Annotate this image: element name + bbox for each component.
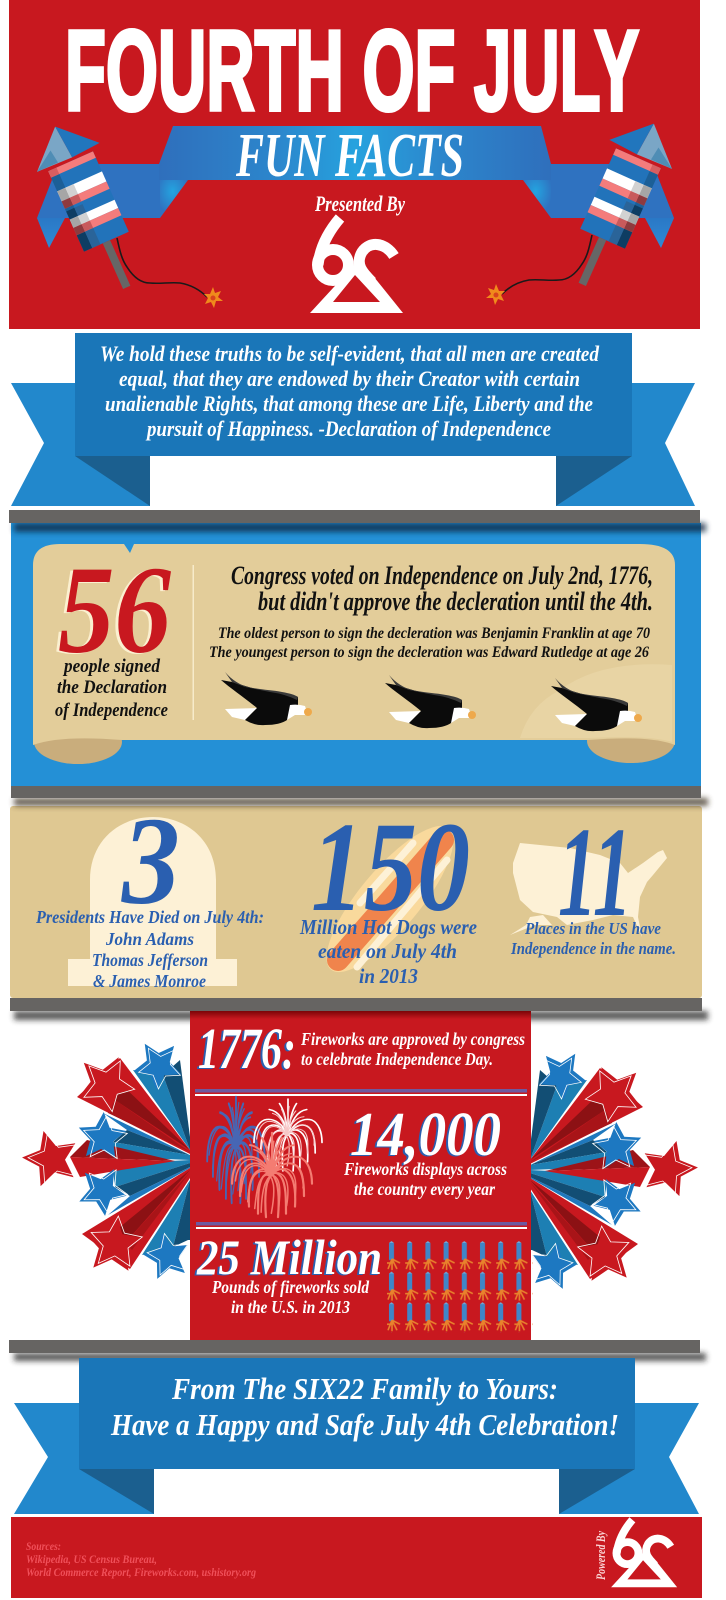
icon: eagle 2 (385, 675, 476, 728)
icon: tombstone (68, 817, 237, 986)
caption: people signed: the Declaration (57, 677, 167, 698)
quote text: equal, that they are endowed by their Creator with certain (119, 366, 580, 391)
icon: eagle 3 (551, 678, 642, 731)
stat: 25 million: 25 Million (196, 1229, 382, 1285)
caption: 1776 (300, 1029, 525, 1069)
stat: 1776: 1776: (198, 1016, 296, 1081)
divider 2 (196, 1222, 527, 1229)
panel: header (9, 0, 700, 329)
shadow bar 4 (9, 1340, 706, 1361)
caption: presidents: Thomas Jefferson (92, 950, 208, 970)
sources (26, 1539, 256, 1579)
scroll (33, 544, 675, 764)
icon: rocket grid (387, 1241, 533, 1333)
caption: displays (343, 1159, 507, 1199)
caption: places: Independence in the name. (510, 939, 676, 958)
stat: 56: 56 (58, 542, 171, 680)
divider (192, 565, 194, 720)
icon: small six22 logo (611, 1520, 677, 1587)
panel: stats (10, 793, 702, 998)
divider 1 (195, 1089, 527, 1096)
closing text: Have a Happy and Safe July 4th Celebration! (110, 1407, 619, 1442)
ribbon tails (11, 383, 695, 506)
caption: hot dogs: eaten on July 4th (318, 939, 457, 963)
quote text: pursuit of Happiness. -Declaration of Independence (145, 416, 551, 441)
caption: people signed: people signed (62, 656, 160, 677)
closing text: From The SIX22 Family to Yours: (171, 1371, 558, 1406)
icon: right rocket (486, 110, 686, 305)
icon: hot dog (308, 809, 472, 989)
panel: footer (11, 1517, 702, 1598)
icon: usa map (510, 843, 667, 937)
caption: 1776: Fireworks are approved by congress (300, 1029, 525, 1049)
presented by: Presented By (314, 191, 405, 216)
closing text (110, 1371, 619, 1442)
caption: hot dogs (299, 915, 477, 988)
quote text: unalienable Rights, that among these are Life, Liberty and the (105, 391, 593, 416)
star burst: right (527, 1041, 703, 1291)
ribbon: fun facts (37, 126, 674, 248)
caption: hot dogs: Million Hot Dogs were (299, 915, 477, 939)
tan background (10, 806, 702, 998)
stat: 11: 11 (558, 801, 632, 943)
caption: presidents: John Adams (105, 929, 194, 949)
ribbon front (75, 333, 632, 456)
icon: eagle 1 (221, 672, 312, 725)
panel: signers (11, 523, 701, 786)
caption: presidents: & James Monroe (93, 971, 206, 991)
caption: people signed: of Independence (55, 700, 168, 721)
signer ages: The youngest person to sign the decleration was Edward Rutledge at age 26 (209, 644, 649, 661)
icon: six22 logo (310, 218, 403, 313)
stat: 14,000: 14,000 (350, 1101, 501, 1169)
quote text (100, 341, 600, 441)
sources: Sources: (26, 1539, 61, 1553)
signer ages: The oldest person to sign the decleration was Benjamin Franklin at age 70 (218, 625, 650, 642)
heading: congress (231, 561, 653, 616)
ribbon tails (14, 1403, 699, 1514)
panel: fireworks (190, 1011, 533, 1340)
ribbon front (79, 1358, 635, 1469)
caption: places: Places in the US have (524, 919, 661, 938)
powered by: Powered By (593, 1531, 608, 1580)
shadow bar 1 (9, 510, 706, 532)
caption: presidents: Presidents Have Died on July 4th: (35, 907, 264, 927)
caption: hot dogs: in 2013 (359, 964, 418, 988)
signer ages (209, 625, 650, 661)
quote text: We hold these truths to be self-evident, that all men are created (100, 341, 600, 366)
icon: left rocket (23, 113, 223, 308)
caption: pounds: in the U.S. in 2013 (231, 1297, 350, 1317)
stat: 3: 3 (121, 793, 180, 931)
header background (9, 0, 700, 329)
shadow bar 2 (11, 786, 708, 806)
sources: World Commerce Report, Fireworks.com, ushistory.org (26, 1565, 256, 1579)
subtitle: fun facts: FUN FACTS (235, 122, 464, 190)
caption: places (510, 919, 676, 958)
shadow bar 3 (10, 998, 708, 1020)
caption: displays: Fireworks displays across (343, 1159, 507, 1179)
caption: people signed (55, 656, 168, 721)
caption: displays: the country every year (354, 1179, 496, 1199)
sources: Wikipedia, US Census Bureau, (26, 1552, 157, 1566)
caption: 1776: to celebrate Independence Day. (301, 1049, 493, 1069)
caption: presidents (35, 907, 264, 991)
caption: pounds: Pounds of fireworks sold (211, 1277, 370, 1297)
icon: fireworks (205, 1097, 322, 1217)
footer background (11, 1517, 702, 1598)
banner: declaration quote (11, 333, 695, 506)
red background (190, 1011, 531, 1340)
stat: 150: 150 (311, 796, 470, 938)
star burst: left (17, 1031, 193, 1281)
blue background (11, 523, 701, 786)
caption: pounds (211, 1277, 370, 1317)
banner: closing message (14, 1358, 699, 1514)
